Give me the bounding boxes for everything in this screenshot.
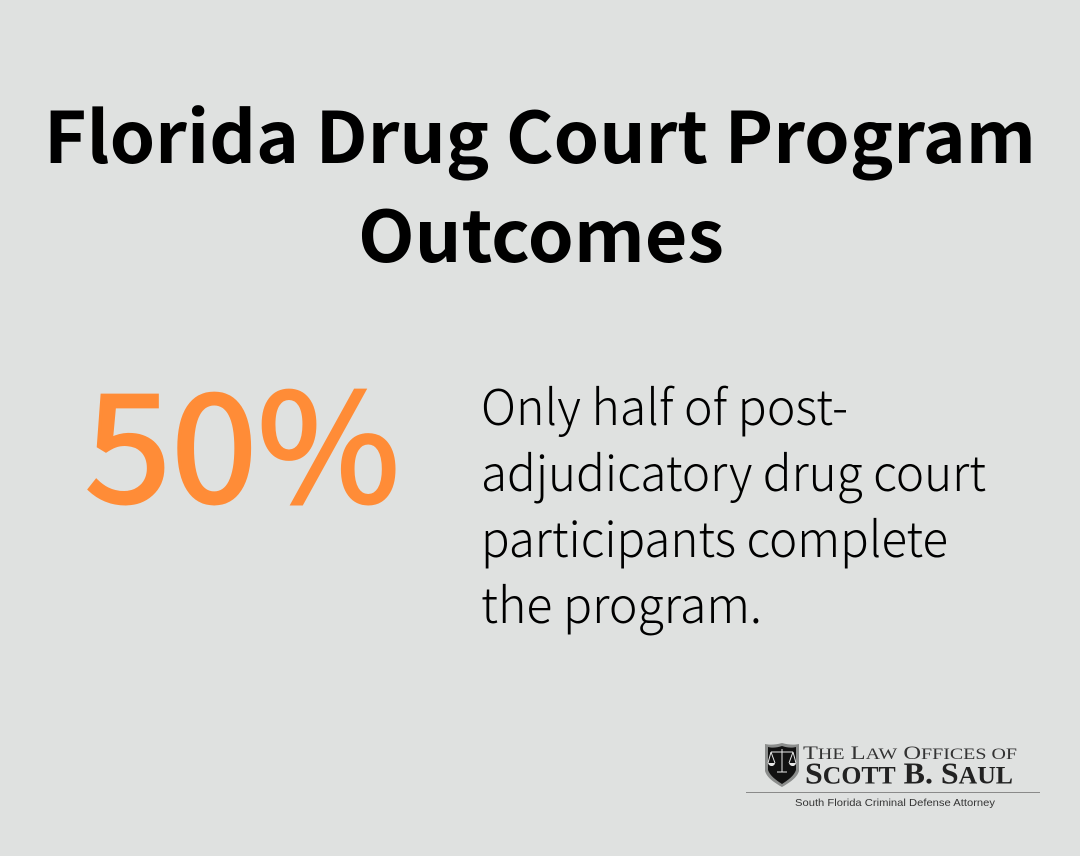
description text: participants complete bbox=[481, 501, 948, 572]
icon: shield with scales bbox=[765, 743, 799, 787]
logo tagline: South Florida Criminal Defense Attorney bbox=[795, 797, 996, 809]
title: Florida Drug Court Program bbox=[44, 82, 1036, 184]
description text: Only half of post- bbox=[481, 369, 848, 440]
title: Outcomes bbox=[358, 181, 724, 283]
law office logo bbox=[746, 743, 1040, 809]
title bbox=[44, 82, 1036, 283]
logo text: the law offices of: THE L AW O FFICES OF bbox=[803, 743, 1017, 764]
description text: adjudicatory drug court bbox=[481, 435, 986, 506]
statistic: 50%: 50% bbox=[85, 329, 400, 546]
description text bbox=[481, 369, 986, 638]
description text: the program. bbox=[481, 567, 762, 638]
logo text: scott b. saul: SCOTT B. SAUL bbox=[805, 756, 1013, 790]
